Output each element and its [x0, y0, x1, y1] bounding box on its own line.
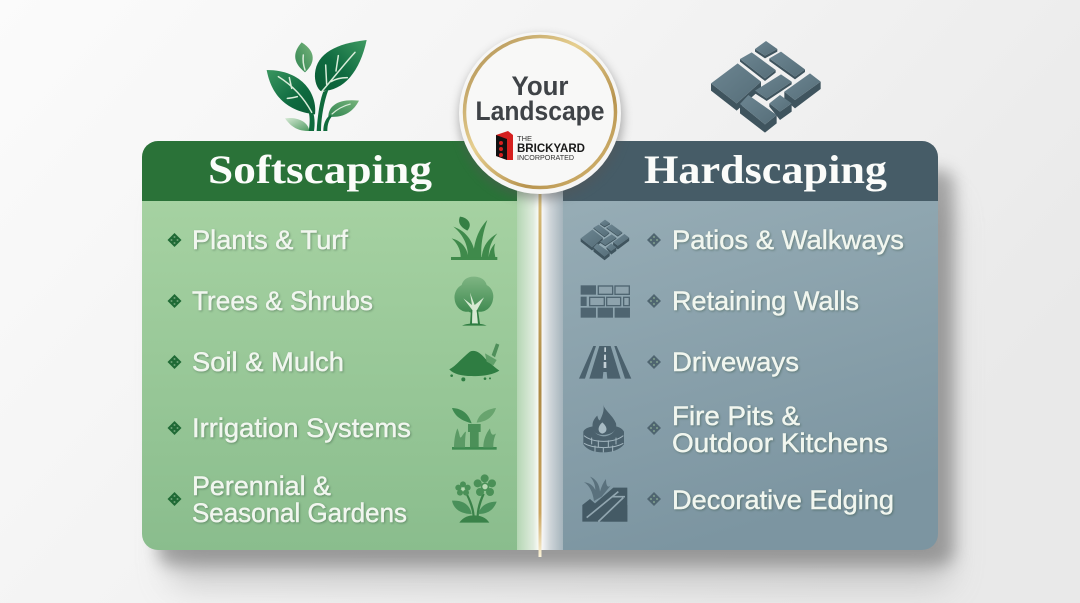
icon: road — [579, 346, 631, 379]
panel: hardscaping — [563, 141, 938, 550]
list: hardscaping items: Decorative Edging — [672, 485, 894, 515]
list: softscaping items: Plants & Turf — [192, 225, 348, 255]
icon: flowers — [452, 474, 497, 523]
list: softscaping items: Trees & Shrubs — [192, 286, 373, 316]
softscaping header bar — [142, 141, 517, 201]
list: hardscaping items: Fire Pits & — [672, 401, 800, 431]
panel: softscaping — [142, 141, 517, 550]
list: softscaping items: Seasonal Gardens — [192, 498, 407, 528]
hardscaping panel body — [563, 195, 938, 550]
hardscaping header bar — [563, 141, 938, 201]
list: hardscaping items — [647, 225, 904, 515]
center badge: Landscape — [476, 96, 604, 126]
list: softscaping items — [168, 225, 411, 528]
badge title: Your — [512, 71, 569, 101]
center divider — [517, 190, 563, 557]
logo: The Brickyard Incorporated: INCORPORATED — [517, 153, 575, 162]
list: softscaping items: Soil & Mulch — [192, 347, 344, 377]
softscaping panel body — [142, 195, 517, 550]
list: softscaping items: Irrigation Systems — [192, 413, 411, 443]
list: hardscaping items: Outdoor Kitchens — [672, 428, 888, 458]
heading: Softscaping: Softscaping — [208, 147, 432, 192]
center badge — [459, 32, 623, 200]
icon: soil and trowel — [449, 343, 499, 381]
icon: decorative edging — [582, 477, 627, 522]
logo: The Brickyard Incorporated — [496, 131, 585, 162]
icon: fire pit — [583, 404, 624, 452]
icon: pavers — [711, 41, 821, 133]
heading: Hardscaping: Hardscaping — [644, 147, 887, 192]
list: hardscaping items: Patios & Walkways — [672, 225, 904, 255]
icon: sprout irrigation — [452, 408, 497, 450]
logo: The Brickyard Incorporated: THE — [517, 134, 532, 143]
panel shadow — [158, 170, 954, 585]
icon: leaves — [267, 40, 367, 131]
icon: tree — [454, 277, 493, 326]
icon: grass — [451, 217, 497, 260]
list: softscaping items: Perennial & — [192, 471, 331, 501]
icon: paver patio — [581, 220, 629, 260]
list: hardscaping items: Driveways — [672, 347, 799, 377]
list: hardscaping items: Retaining Walls — [672, 286, 859, 316]
logo: The Brickyard Incorporated: BRICKYARD — [517, 143, 585, 155]
icon: brick wall — [581, 285, 630, 318]
